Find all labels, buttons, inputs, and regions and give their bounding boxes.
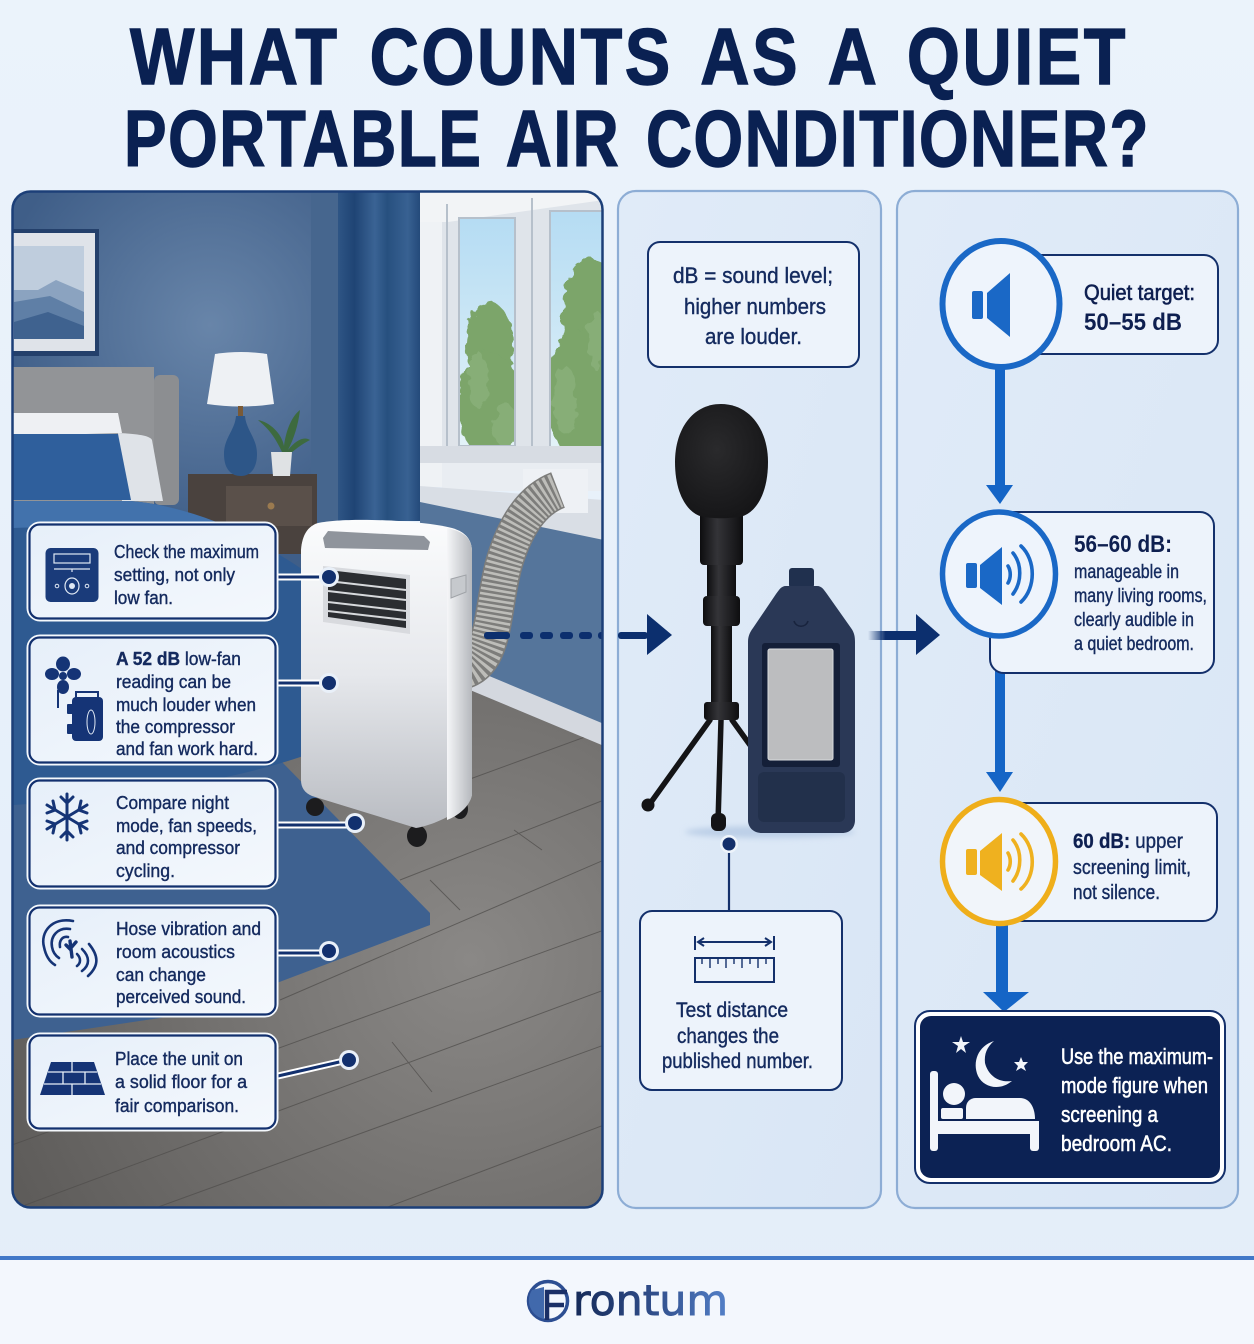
rug	[12, 760, 430, 1040]
window	[420, 193, 602, 540]
icon: bed, moon and stars	[930, 1036, 1039, 1151]
test distance card: Test distance	[676, 999, 788, 1022]
potted plant	[258, 410, 310, 476]
callout: night mode and cycling: cycling.	[116, 860, 175, 881]
logo: Frontum: rontum	[573, 1276, 728, 1325]
panel: decibel ladder	[868, 191, 1238, 1208]
60 dB card: not silence.	[1073, 882, 1160, 904]
quiet target card: 50–55 dB	[1084, 309, 1182, 336]
measurement microphone on tripod	[642, 404, 768, 831]
headboard	[10, 367, 179, 507]
lower right wall	[420, 490, 604, 726]
icon: floor tiles	[40, 1062, 105, 1095]
callout: low-fan reading versus compressor: A 52 dB low-fan	[116, 648, 241, 669]
56-60 dB card: 56–60 dB:	[1074, 531, 1172, 558]
definition card: are louder.	[705, 324, 802, 349]
title	[124, 12, 1150, 183]
trees	[460, 256, 602, 446]
bedroom recommendation card: mode figure when	[1061, 1073, 1208, 1098]
56-60 dB card: clearly audible in	[1074, 610, 1194, 631]
sound level meter	[748, 568, 855, 833]
portable air conditioner	[301, 520, 472, 847]
callout: night mode and cycling: mode, fan speeds,	[116, 815, 257, 836]
arrow: meter to ladder	[868, 614, 940, 655]
ground shadow	[685, 826, 855, 838]
step arrow 3	[983, 924, 1029, 1012]
panel: bedroom photo scene with callouts	[10, 191, 625, 1210]
callout: low-fan reading versus compressor: the compressor	[116, 716, 235, 737]
callout: hose vibration and acoustics: perceived sound.	[116, 986, 246, 1007]
dashed flow line	[484, 632, 610, 639]
callout: check the maximum setting: Check the maximum	[114, 541, 259, 562]
56-60 dB card: manageable in	[1074, 562, 1179, 583]
baseboard	[472, 676, 602, 745]
callout: check the maximum setting: setting, not only	[114, 564, 236, 585]
pin connector	[720, 835, 738, 911]
icon: vibration waves with wrench	[43, 920, 96, 976]
icon: medium speaker	[942, 512, 1056, 636]
callout: solid floor: a solid floor for a	[115, 1071, 248, 1092]
test distance card: changes the	[677, 1025, 779, 1048]
icon: ruler with distance arrow	[695, 936, 774, 982]
photo panel border	[12, 192, 602, 1208]
56-60 dB card: many living rooms,	[1074, 586, 1207, 607]
quiet target card	[1000, 255, 1218, 354]
step arrow 1	[986, 368, 1013, 504]
definition card	[648, 242, 859, 367]
footer band	[0, 1256, 1254, 1344]
bedroom recommendation card: Use the maximum-	[1061, 1044, 1213, 1069]
flow arrow head into meter	[618, 614, 672, 655]
table lamp	[207, 352, 274, 476]
panel: sound meter	[618, 191, 881, 1208]
60 dB card: 60 dB: upper	[1073, 830, 1183, 853]
callout: low-fan reading versus compressor: and fan work hard.	[116, 738, 258, 759]
icon: snowflake	[47, 794, 87, 840]
bedroom illustration	[10, 191, 625, 1210]
callout: hose vibration and acoustics: Hose vibration and	[116, 918, 261, 939]
test distance card	[640, 911, 842, 1090]
callout: hose vibration and acoustics: room acoustics	[116, 941, 235, 962]
flexible exhaust hose	[455, 490, 558, 672]
test distance card: published number.	[662, 1050, 813, 1073]
callout: low-fan reading versus compressor	[28, 636, 339, 764]
callout: check the maximum setting	[28, 523, 339, 620]
nightstand	[188, 474, 317, 554]
callout: night mode and cycling	[28, 779, 365, 888]
callout: solid floor: Place the unit on	[115, 1048, 243, 1069]
bedroom recommendation card: screening a	[1061, 1102, 1159, 1127]
curtain	[338, 191, 420, 521]
callout: solid floor: fair comparison.	[115, 1095, 239, 1116]
icon: fan and compressor	[45, 656, 103, 741]
floor	[12, 680, 604, 1210]
60 dB card: screening limit,	[1073, 857, 1191, 879]
callout: low-fan reading versus compressor: reading can be	[116, 671, 231, 692]
callout: hose vibration and acoustics: can change	[116, 964, 206, 985]
wall picture	[10, 229, 99, 356]
60 dB card	[990, 803, 1217, 921]
callout: low-fan reading versus compressor: much louder when	[116, 694, 256, 715]
callout: night mode and cycling: and compressor	[116, 837, 240, 858]
definition card: higher numbers	[684, 294, 826, 319]
bedroom recommendation card: bedroom AC.	[1061, 1131, 1172, 1156]
callout: check the maximum setting: low fan.	[114, 587, 173, 608]
quiet target card: Quiet target:	[1084, 280, 1195, 305]
bedroom recommendation card	[915, 1011, 1225, 1183]
56-60 dB card: a quiet bedroom.	[1074, 634, 1194, 655]
step arrow 2	[986, 636, 1013, 792]
bed	[12, 413, 306, 805]
callout: solid floor	[28, 1034, 359, 1130]
56-60 dB card	[990, 512, 1214, 673]
icon: AC remote panel	[46, 548, 98, 602]
callout: night mode and cycling: Compare night	[116, 792, 229, 813]
icon: upper limit speaker	[942, 800, 1056, 924]
definition card: dB = sound level;	[673, 263, 833, 288]
callout: hose vibration and acoustics	[28, 906, 339, 1016]
icon: quiet speaker	[942, 241, 1060, 367]
